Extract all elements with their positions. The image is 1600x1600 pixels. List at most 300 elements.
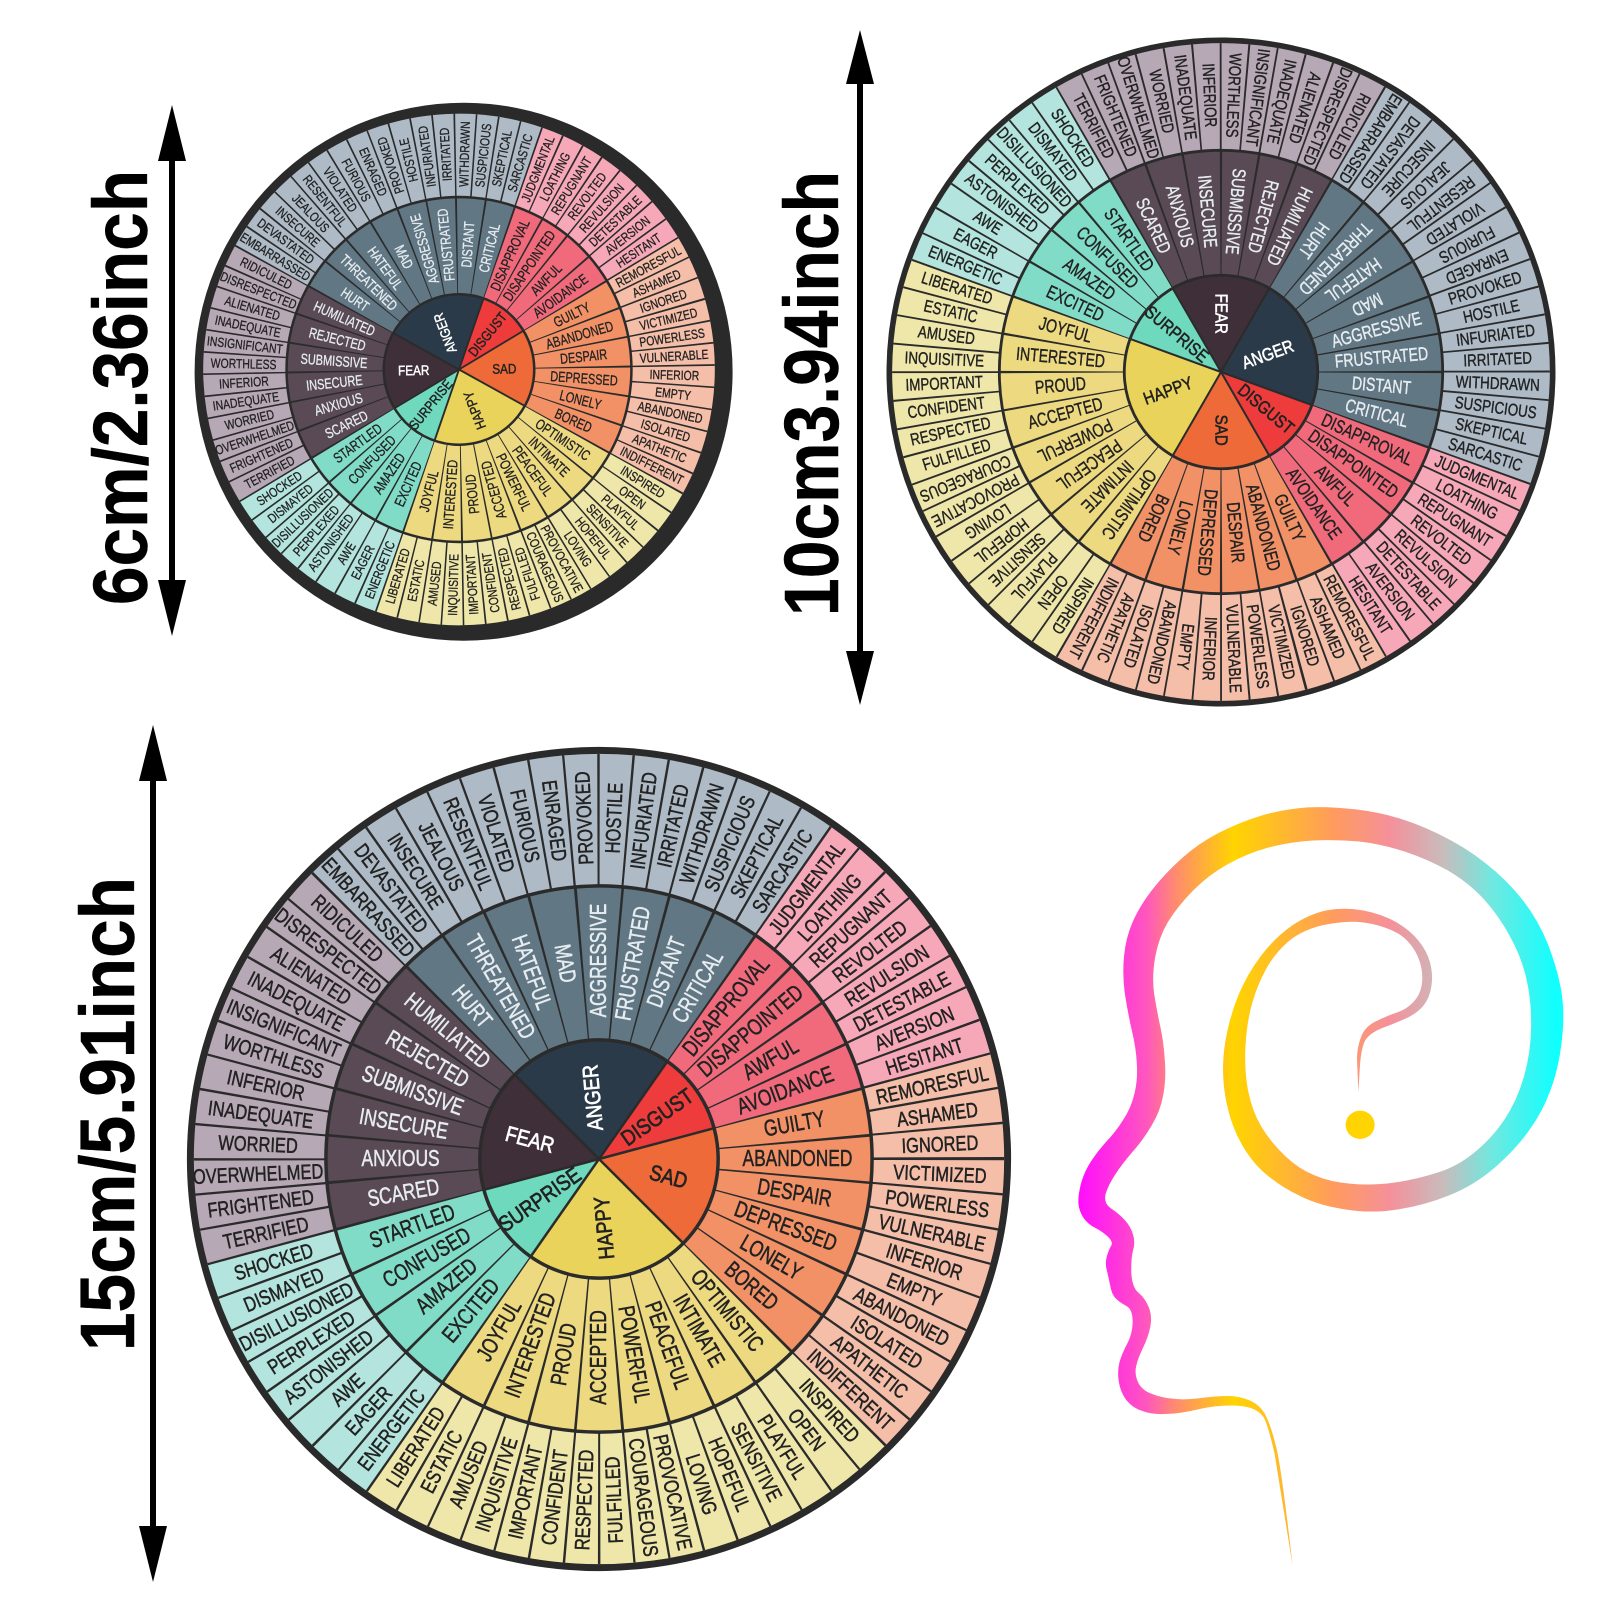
outer ring words: REVULSION bbox=[1390, 526, 1460, 592]
outer ring words: ENRAGED bbox=[538, 779, 571, 863]
middle ring words: DISAPPROVAL bbox=[487, 217, 533, 293]
middle ring words: HATEFUL bbox=[1321, 253, 1385, 306]
outer ring words: ENERGETIC bbox=[925, 242, 1005, 290]
outer ring words: COURAGEOUS bbox=[917, 451, 1013, 505]
outer ring words: RESENTFUL bbox=[1403, 172, 1478, 235]
outer ring words: INADEQUATE bbox=[214, 312, 282, 341]
middle ring words: DISTANT bbox=[458, 221, 478, 268]
arrow: 15cm bbox=[139, 725, 167, 1582]
outer ring words: RIDICULED bbox=[1324, 90, 1374, 163]
dimension label: 6cm: 6cm/2.36inch bbox=[78, 170, 164, 605]
middle ring words: PEACEFUL bbox=[509, 443, 556, 499]
outer ring words: WITHDRAWN bbox=[1455, 373, 1540, 395]
outer ring words: LIBERATED bbox=[919, 269, 995, 309]
outer ring words: POWERLESS bbox=[1242, 603, 1272, 690]
outer ring words: PLAYFUL bbox=[598, 491, 643, 533]
outer ring words: LIBERATED bbox=[382, 1402, 450, 1491]
middle ring words: AGGRESSIVE bbox=[1329, 309, 1424, 352]
outer ring words: WITHDRAWN bbox=[675, 781, 728, 886]
hub sectors bbox=[393, 303, 525, 436]
outer ring words: SKEPTICAL bbox=[725, 811, 788, 902]
outer ring words: ASTONISHED bbox=[961, 170, 1041, 237]
outer ring words: CONFIDENT bbox=[537, 1448, 572, 1546]
outer ring words: SKEPTICAL bbox=[1453, 415, 1529, 449]
outer ring words: ENRAGED bbox=[1443, 245, 1511, 287]
outer ring words: ALIENATED bbox=[223, 293, 282, 324]
outer ring sectors bbox=[81, 0, 837, 748]
middle ring words: SCARED bbox=[366, 1175, 441, 1212]
outer ring words: DEVASTATED bbox=[350, 839, 433, 937]
outer ring words: HOSTILE bbox=[1461, 297, 1521, 327]
outer ring words: INFERIOR bbox=[225, 1065, 307, 1105]
outer ring words: VICTIMIZED bbox=[1264, 603, 1298, 681]
outer ring words: INQUISITIVE bbox=[445, 554, 462, 616]
outer ring words: AVERSION bbox=[871, 1002, 957, 1055]
outer ring words: AMUSED bbox=[444, 1437, 493, 1511]
wheel border bbox=[807, 0, 1600, 786]
outer ring words: VIOLATED bbox=[473, 792, 520, 875]
middle ring words: FRUSTRATED bbox=[611, 905, 656, 1022]
middle ring words bbox=[353, 899, 857, 1410]
outer ring words: HOSTILE bbox=[396, 136, 421, 183]
middle ring words: HUMILIATED bbox=[399, 989, 495, 1074]
outer ring words: SHOCKED bbox=[231, 1238, 316, 1285]
outer ring words: DEVASTATED bbox=[254, 215, 317, 268]
hub words bbox=[377, 293, 539, 450]
middle ring words: SCARED bbox=[322, 407, 371, 442]
outer ring words: ESTATIC bbox=[922, 297, 979, 327]
middle ring words: AWFUL bbox=[1311, 462, 1359, 510]
outer ring words: LOATHING bbox=[537, 150, 574, 204]
outer ring words: OPEN bbox=[783, 1404, 830, 1455]
middle ring words: INTIMATE bbox=[668, 1290, 729, 1372]
middle ring words: ANXIOUS bbox=[313, 389, 365, 419]
outer ring words: TERRIFIED bbox=[1068, 91, 1118, 162]
outer ring words: REVOLTED bbox=[1407, 511, 1475, 570]
outer ring words: DISMAYED bbox=[240, 1263, 327, 1317]
middle ring words: ACCEPTED bbox=[477, 459, 510, 521]
outer ring words: EMPTY bbox=[1172, 623, 1197, 671]
dimension label: 15cm: 15cm/5.91inch bbox=[65, 877, 151, 1351]
middle ring words bbox=[975, 127, 1477, 625]
outer ring sectors bbox=[111, 671, 1087, 1600]
middle ring words: PROUD bbox=[1034, 374, 1087, 398]
outer ring words: INFERIOR bbox=[1198, 616, 1220, 681]
middle ring words: PROUD bbox=[462, 474, 483, 515]
middle ring words: ANXIOUS bbox=[361, 1147, 440, 1171]
outer ring words: AVERSION bbox=[1361, 559, 1418, 625]
outer ring words: INADEQUATE bbox=[212, 389, 280, 414]
outer ring words: POWERLESS bbox=[638, 325, 706, 350]
middle ring words: STARTLED bbox=[366, 1200, 459, 1254]
outer ring words: ABANDONED bbox=[1143, 599, 1179, 686]
middle ring words: INSECURE bbox=[1194, 174, 1220, 249]
outer ring words: JUDGMENTAL bbox=[1432, 452, 1522, 504]
outer ring words: CONFIDENT bbox=[479, 551, 503, 614]
hub sectors bbox=[513, 1073, 685, 1245]
middle ring words: SCARED bbox=[1131, 195, 1175, 257]
outer ring words bbox=[818, 0, 1600, 768]
outer ring words: ASTONISHED bbox=[305, 511, 357, 574]
outer ring words: HESITANT bbox=[613, 230, 664, 271]
outer ring words: AWE bbox=[326, 1368, 369, 1411]
middle ring words: DISAPPROVAL bbox=[1318, 410, 1416, 470]
middle ring words: INTIMATE bbox=[525, 433, 573, 480]
outer ring words: DISRESPECTED bbox=[218, 268, 299, 313]
wheel border bbox=[195, 103, 733, 641]
outer ring words: DETESTABLE bbox=[849, 967, 954, 1036]
arrow: 6cm bbox=[158, 105, 186, 636]
outer ring words: IGNORED bbox=[901, 1131, 979, 1157]
outer ring words: INSIGNIFICANT bbox=[206, 333, 284, 357]
outer ring words: POWERLESS bbox=[884, 1185, 991, 1222]
middle ring words: REJECTED bbox=[307, 324, 367, 354]
outer ring words: INSPIRED bbox=[795, 1374, 864, 1447]
outer ring words: VULNERABLE bbox=[639, 346, 709, 366]
middle ring words: ACCEPTED bbox=[1026, 394, 1105, 433]
hub words: DISGUST bbox=[1234, 380, 1298, 438]
middle ring words: FRUSTRATED bbox=[434, 208, 458, 282]
outer ring words: WORRIED bbox=[218, 1131, 298, 1157]
middle ring words: DEPRESSED bbox=[1193, 488, 1221, 577]
hub words: FEAR bbox=[1211, 294, 1231, 334]
outer ring words: VIOLATED bbox=[320, 164, 361, 215]
outer ring words: INFURIATED bbox=[1455, 321, 1536, 350]
middle ring words: MAD bbox=[549, 942, 580, 985]
middle ring words: DISAPPROVAL bbox=[678, 953, 775, 1061]
outer ring words: INADEQUATE bbox=[244, 967, 349, 1036]
hub words: FEAR bbox=[398, 362, 429, 379]
wheel: 6cm bbox=[81, 0, 837, 748]
middle ring words: CRITICAL bbox=[475, 222, 504, 274]
outer ring words: INSPIRED bbox=[618, 463, 668, 502]
middle ring words: MAD bbox=[1348, 288, 1385, 320]
middle ring words: INTIMATE bbox=[1077, 456, 1137, 516]
outer ring words: DISILLUSIONED bbox=[269, 485, 337, 551]
outer ring words: REVULSION bbox=[840, 940, 933, 1011]
outer ring words: INFERIOR bbox=[649, 367, 700, 384]
middle ring words: THREATENED bbox=[337, 251, 401, 314]
outer ring words: LOVING bbox=[681, 1451, 722, 1518]
middle ring words: DISAPPOINTED bbox=[499, 227, 559, 304]
middle ring words: STARTLED bbox=[330, 420, 385, 467]
outer ring words: DETESTABLE bbox=[1372, 538, 1444, 614]
outer ring words: RESPECTED bbox=[570, 1449, 598, 1551]
middle ring words: ABANDONED bbox=[1241, 482, 1284, 573]
outer ring words: PROVOKED bbox=[374, 135, 407, 196]
outer ring words: HOPEFUL bbox=[572, 514, 615, 562]
middle ring words: AMAZED bbox=[369, 450, 409, 497]
middle ring words: DESPAIR bbox=[755, 1175, 833, 1212]
outer ring words: PERPLEXED bbox=[263, 1306, 359, 1379]
hub words: SURPRISE bbox=[405, 376, 456, 433]
outer ring words: VICTIMIZED bbox=[638, 305, 699, 334]
middle ring words: AWFUL bbox=[527, 260, 565, 299]
middle ring words: ACCEPTED bbox=[587, 1310, 611, 1405]
wheel: 15cm bbox=[111, 671, 1087, 1600]
middle ring words: POWERFUL bbox=[613, 1304, 654, 1405]
hub words: HAPPY bbox=[460, 388, 489, 432]
outer ring words: EAGER bbox=[348, 542, 378, 582]
outer ring words: INSECURE bbox=[1378, 136, 1438, 200]
outer ring words: SHOCKED bbox=[254, 468, 305, 509]
middle ring words: PEACEFUL bbox=[1053, 435, 1125, 494]
middle ring words: HATEFUL bbox=[364, 243, 407, 293]
middle ring words: SUBMISSIVE bbox=[300, 350, 368, 372]
middle ring words: HURT bbox=[338, 284, 372, 315]
outer ring words: ABANDONED bbox=[636, 398, 704, 427]
middle ring sectors bbox=[943, 94, 1499, 650]
middle ring words: DISTANT bbox=[643, 934, 691, 1011]
outer ring words: ASHAMED bbox=[630, 266, 683, 301]
outer ring words: INQUISITIVE bbox=[471, 1434, 522, 1535]
outer ring words: FULFILLED bbox=[920, 436, 993, 475]
outer ring words: SUSPICIOUS bbox=[1454, 393, 1538, 423]
outer ring words: INSIGNIFICANT bbox=[223, 995, 344, 1062]
hub words: SAD bbox=[647, 1161, 690, 1194]
hub words: ANGER bbox=[430, 311, 460, 356]
middle ring words: AGGRESSIVE bbox=[587, 904, 611, 1017]
outer ring words: EMBARRASSED bbox=[1334, 90, 1405, 187]
middle ring words: LONELY bbox=[1162, 499, 1196, 557]
outer ring words: FULFILLED bbox=[600, 1456, 627, 1544]
outer ring words: REVULSION bbox=[576, 180, 628, 236]
middle ring words: JOYFUL bbox=[472, 1296, 527, 1366]
hub words: DISGUST bbox=[465, 309, 510, 360]
outer ring words: INFERIOR bbox=[883, 1239, 965, 1285]
middle ring words: DISTANT bbox=[1351, 373, 1412, 399]
outer ring words: INDIFFERENT bbox=[803, 1344, 899, 1435]
outer ring words: ESTATIC bbox=[416, 1427, 467, 1497]
outer ring words: IGNORED bbox=[638, 286, 689, 316]
middle ring sectors bbox=[240, 151, 678, 588]
outer ring words: WORTHLESS bbox=[211, 355, 277, 372]
outer ring words: HOSTILE bbox=[601, 782, 627, 854]
outer ring words: DISRESPECTED bbox=[270, 903, 386, 999]
outer ring words: HESITANT bbox=[883, 1033, 967, 1080]
outer ring sectors bbox=[740, 0, 1600, 853]
outer ring words bbox=[142, 63, 770, 686]
outer ring words: PROVOKED bbox=[1446, 268, 1524, 309]
hub words: SURPRISE bbox=[1141, 302, 1212, 367]
middle ring words: EXCITED bbox=[1043, 282, 1107, 326]
outer ring words: LOATHING bbox=[1432, 476, 1501, 524]
hub words: DISGUST bbox=[617, 1084, 698, 1151]
outer ring words: INSECURE bbox=[272, 203, 323, 250]
middle ring words: ANXIOUS bbox=[1161, 183, 1197, 250]
middle ring words: INTERESTED bbox=[1015, 344, 1106, 372]
outer ring words: ASHAMED bbox=[1306, 594, 1348, 662]
middle ring words: CRITICAL bbox=[668, 947, 729, 1028]
outer ring words: REPUGNANT bbox=[805, 885, 897, 972]
middle ring words: HUMILIATED bbox=[311, 297, 378, 340]
middle ring words: HUMILIATED bbox=[1262, 184, 1316, 269]
outer ring words: JUDGMENTAL bbox=[764, 837, 850, 939]
middle ring words: CRITICAL bbox=[1343, 396, 1410, 432]
head outline and spiral bbox=[1078, 807, 1563, 1566]
middle ring words: GUILTY bbox=[762, 1107, 827, 1142]
outer ring words: INQUISITIVE bbox=[904, 349, 984, 371]
outer ring words: LOATHING bbox=[793, 869, 866, 946]
outer ring words: PLAYFUL bbox=[753, 1410, 812, 1483]
wheel face bbox=[81, 0, 837, 748]
outer ring words: SARCASTIC bbox=[1446, 435, 1524, 476]
outer ring words: AVERSION bbox=[602, 213, 653, 258]
outer ring words: RESENTFUL bbox=[300, 172, 350, 230]
hub words: HAPPY bbox=[590, 1195, 620, 1260]
outer ring words: RESPECTED bbox=[494, 546, 524, 612]
outer ring words: WORRIED bbox=[223, 406, 276, 433]
dimension label: 10cm: 10cm3.94inch bbox=[769, 171, 855, 616]
middle ring words: ABANDONED bbox=[743, 1147, 852, 1171]
outer ring words: ISOLATED bbox=[639, 416, 692, 445]
question mark dot bbox=[1346, 1111, 1375, 1139]
outer ring words: JEALOUS bbox=[414, 818, 469, 895]
outer ring words: SARCASTIC bbox=[747, 825, 817, 917]
outer ring words: INFERIOR bbox=[219, 373, 270, 392]
outer ring words: FURIOUS bbox=[506, 787, 545, 865]
middle ring words bbox=[266, 168, 658, 563]
hub words: ANGER bbox=[1239, 337, 1297, 373]
middle ring words: AMAZED bbox=[411, 1254, 483, 1319]
middle ring words: INSECURE bbox=[305, 371, 363, 394]
outer ring words: INADEQUATE bbox=[207, 1096, 315, 1133]
outer ring words: SENSITIVE bbox=[985, 529, 1049, 590]
outer ring words: IRRITATED bbox=[1463, 349, 1532, 371]
middle ring words: DISAPPOINTED bbox=[694, 980, 808, 1082]
middle ring words: INTERESTED bbox=[501, 1290, 562, 1401]
outer ring words: JUDGMENTAL bbox=[518, 133, 558, 204]
outer ring words: REMORESFUL bbox=[613, 242, 684, 291]
middle ring words: JOYFUL bbox=[1037, 314, 1094, 347]
outer ring words: IGNORED bbox=[1286, 604, 1323, 669]
middle ring words: AWFUL bbox=[739, 1034, 803, 1086]
outer ring words: RIDICULED bbox=[238, 254, 295, 293]
outer ring words: INSIGNIFICANT bbox=[1241, 48, 1273, 147]
middle ring words: AVOIDANCE bbox=[734, 1062, 837, 1120]
outer ring words: DEVASTATED bbox=[1356, 112, 1423, 192]
hub words: HAPPY bbox=[1141, 373, 1196, 409]
outer ring words: DISMAYED bbox=[265, 481, 316, 526]
hub words: ANGER bbox=[579, 1064, 608, 1132]
outer ring words: RIDICULED bbox=[307, 890, 388, 967]
outer ring words: RESPECTED bbox=[909, 414, 993, 450]
middle ring words: AVOIDANCE bbox=[1282, 465, 1345, 543]
outer ring words: LIBERATED bbox=[382, 547, 413, 606]
outer ring words: HOPEFUL bbox=[970, 514, 1032, 567]
outer ring words: REMORESFUL bbox=[874, 1061, 991, 1109]
outer ring words: INDIFFERENT bbox=[1064, 574, 1122, 661]
hub words: SAD bbox=[1211, 415, 1231, 446]
middle ring words: JOYFUL bbox=[415, 469, 442, 514]
hub words: SAD bbox=[492, 360, 516, 377]
middle ring words: EXCITED bbox=[391, 459, 425, 509]
outer ring words: EAGER bbox=[340, 1381, 397, 1440]
middle ring words: OPTIMISTIC bbox=[685, 1265, 768, 1357]
outer ring words: INADEQUATE bbox=[1262, 58, 1299, 146]
outer ring words: SUSPICIOUS bbox=[472, 123, 495, 188]
outer ring words: SKEPTICAL bbox=[489, 128, 515, 188]
outer ring words: REVOLTED bbox=[564, 169, 610, 223]
middle ring words: DESPAIR bbox=[559, 346, 608, 367]
outer ring words: SENSITIVE bbox=[583, 501, 632, 551]
outer ring words: PROVOCATIVE bbox=[929, 469, 1022, 530]
outer ring words: ALIENATED bbox=[267, 942, 356, 1010]
outer ring words bbox=[186, 764, 999, 1565]
wheel: 10cm bbox=[740, 0, 1600, 853]
outer ring words: WITHDRAWN bbox=[456, 121, 473, 187]
middle ring words: CONFUSED bbox=[379, 1223, 475, 1293]
outer ring words: APATHETIC bbox=[1092, 591, 1138, 665]
middle ring words: ABANDONED bbox=[544, 317, 615, 353]
outer ring words: LOVING bbox=[961, 499, 1014, 542]
outer ring words: DISRESPECTED bbox=[1298, 64, 1356, 168]
middle ring words: CONFUSED bbox=[1072, 223, 1142, 293]
outer ring words: FURIOUS bbox=[1436, 222, 1498, 266]
outer ring words: ISOLATED bbox=[847, 1311, 927, 1374]
outer ring words: AWE bbox=[334, 539, 359, 567]
middle ring words: OPTIMISTIC bbox=[532, 415, 594, 464]
outer ring words: VIOLATED bbox=[1422, 198, 1487, 249]
outer ring words: JEALOUS bbox=[1396, 157, 1454, 212]
outer ring words: WORTHLESS bbox=[220, 1030, 327, 1083]
outer ring words: REPUGNANT bbox=[1414, 490, 1495, 551]
middle ring words: DEPRESSED bbox=[550, 367, 618, 389]
outer ring words: WORTHLESS bbox=[1222, 53, 1244, 138]
outer ring words: OPEN bbox=[616, 483, 649, 513]
hub words bbox=[1118, 268, 1318, 473]
outer ring words: IMPORTANT bbox=[503, 1443, 547, 1541]
outer ring words: INFURIATED bbox=[415, 125, 439, 188]
outer ring words: ISOLATED bbox=[1119, 602, 1156, 670]
outer ring words: SUSPICIOUS bbox=[699, 792, 760, 895]
outer ring words: WORRIED bbox=[1145, 68, 1177, 135]
middle ring words: GUILTY bbox=[1269, 491, 1309, 545]
outer ring words: FULFILLED bbox=[511, 545, 543, 602]
outer ring words: ALIENATED bbox=[1284, 70, 1324, 146]
middle ring words: EXCITED bbox=[438, 1274, 505, 1348]
outer ring words: VICTIMIZED bbox=[893, 1160, 987, 1188]
outer ring words: HOPEFUL bbox=[704, 1434, 755, 1515]
middle ring words: POWERFUL bbox=[493, 451, 535, 514]
middle ring words: AGGRESSIVE bbox=[406, 212, 442, 286]
middle ring words: THREATENED bbox=[460, 931, 540, 1044]
arrow: 10cm bbox=[846, 30, 874, 705]
middle ring words: POWERFUL bbox=[1035, 414, 1115, 466]
outer ring words: EMPTY bbox=[654, 384, 692, 404]
outer ring words: APATHETIC bbox=[827, 1330, 913, 1403]
outer ring words: TERRIFIED bbox=[242, 452, 297, 492]
middle ring words: BORED bbox=[719, 1257, 783, 1316]
outer ring words: APATHETIC bbox=[630, 431, 689, 466]
outer ring words: EAGER bbox=[950, 225, 1000, 263]
outer ring words: ENRAGED bbox=[356, 145, 390, 199]
outer ring words: AMUSED bbox=[917, 323, 976, 349]
middle ring words: MAD bbox=[391, 242, 417, 271]
middle ring words: DEPRESSED bbox=[731, 1197, 840, 1257]
middle ring words: SUBMISSIVE bbox=[358, 1061, 467, 1121]
outer ring words: CONFIDENT bbox=[906, 394, 986, 423]
outer ring words: ABANDONED bbox=[850, 1282, 953, 1351]
outer ring words: SHOCKED bbox=[1046, 105, 1098, 171]
middle ring words: HURT bbox=[447, 981, 496, 1033]
hub words bbox=[492, 1062, 701, 1262]
middle ring words: OPTIMISTIC bbox=[1097, 465, 1160, 543]
outer ring words: PROVOCATIVE bbox=[537, 522, 586, 595]
outer ring words: REMORESFUL bbox=[1319, 572, 1379, 663]
outer ring words: OVERWHELMED bbox=[213, 417, 296, 458]
middle ring words: DESPAIR bbox=[1222, 501, 1248, 564]
